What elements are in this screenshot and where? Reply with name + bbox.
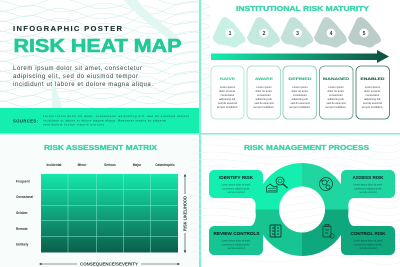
panel: institutional risk maturity: sed do eiusmod [291,101,310,105]
step: review controls: Lorem ipsum dolor sit amet, [221,240,251,242]
panel: institutional risk maturity: adipiscing elit, [292,97,309,101]
intro text: incididunt ut labore et dolore magna aliqua. [13,82,153,88]
heading: RISK ASSESSMENT MATRIX [44,143,157,152]
sources text [43,114,189,127]
step: assess risk: consectetur adipiscing elit, [354,187,382,190]
panel: institutional risk maturity: Lorem ipsum [328,85,345,89]
heading: INSTITUTIONAL RISK MATURITY [236,4,369,13]
panel: institutional risk maturity: Lorem ipsum [292,85,309,89]
heading: risk heat map: RISK HEAT MAP [14,36,182,56]
step: review controls: REVIEW CONTROLS [214,231,260,236]
donut segments [256,163,348,256]
row labels [16,180,33,246]
row labels: Frequent [16,180,31,184]
intro text [13,66,153,88]
step: assess risk: sed do eiusmod [360,191,377,194]
panel: institutional risk maturity: consectetur [257,93,271,97]
panel: institutional risk maturity: adipiscing elit, [219,97,236,101]
arrow [211,50,389,63]
panel: institutional risk maturity: dolor sit amet, [292,89,309,93]
panel: institutional risk maturity: dolor sit amet, [256,89,273,93]
sources label: SOURCES: [13,118,38,124]
panel: poster title [0,0,210,109]
intro text: Lorem ipsum dolor sit amet, consectetur [13,66,142,72]
panel: institutional risk maturity: Lorem ipsum [365,85,381,89]
panel: institutional risk maturity: adipiscing elit, [328,97,345,101]
panel: institutional risk maturity: consectetur [293,93,307,97]
column labels [47,163,175,167]
arrow: risk likelihood [182,174,188,253]
mountain icons: 5 [363,31,366,37]
step: identify risk: IDENTIFY RISK [219,175,253,180]
sources band [0,108,199,133]
panel: institutional risk maturity: consectetur [366,93,380,97]
step: identify risk: consectetur adipiscing elit, [222,187,250,190]
step: control risk: sed do eiusmod [360,247,377,250]
step: control risk [323,212,395,255]
row labels: Occasional [16,195,33,199]
panel: institutional risk maturity: dolor sit amet, [219,89,236,93]
step: identify risk [209,170,288,208]
stage cards [211,66,390,119]
step: control risk: CONTROL RISK [350,231,386,236]
step: assess risk: ASSESS RISK [352,175,384,180]
panel: institutional risk maturity: consectetur [329,93,343,97]
icon: gears [320,178,332,190]
panel: institutional risk maturity: sed do eiusmod [255,101,274,105]
heading: RISK MANAGEMENT PROCESS [244,143,369,152]
sources text: Lorem ipsum dolor sit amet, consectetur adipiscing elit, sed do eiusmod tempor [43,114,189,118]
panel: institutional risk maturity [211,4,390,119]
column labels: Serious [104,163,116,167]
icon: checklist [270,225,281,237]
step: control risk: Lorem ipsum dolor sit amet, [353,240,383,242]
panel: institutional risk maturity: dolor sit amet, [328,89,345,93]
column labels: Incidental [47,163,62,167]
arrow: risk likelihood: RISK LIKELIHOOD [182,196,188,231]
step: review controls: consectetur adipiscing elit, [222,243,250,246]
sources text: vestibulum lectus mauris ultrices [43,123,105,127]
panel: risk management process [190,136,400,265]
panel: institutional risk maturity: sed do eiusmod [327,101,346,105]
column labels: Minor [78,163,87,167]
mountain icons: 1 [229,31,232,37]
mountain icons: 2 [263,31,266,37]
icon: clipboard [323,224,334,238]
panel: institutional risk maturity: consectetur [221,93,235,97]
intro text: adipiscing elit, sed do eiusmod tempor [13,74,138,80]
icon: magnifier [266,177,288,192]
panel: risk assessment matrix [0,134,199,267]
arrow: consequence severity: CONSEQUENCE/SEVERITY [80,262,138,267]
column labels: Major [133,163,142,167]
panel: institutional risk maturity: sed do eiusmod [218,101,237,105]
panel: institutional risk maturity: adipiscing elit, [364,97,381,101]
panel: institutional risk maturity: tempor incididunt. [362,105,383,109]
panel: institutional risk maturity: adipiscing elit, [256,97,273,101]
mountain icons: 3 [296,31,299,37]
step: identify risk: Lorem ipsum dolor sit amet, [221,184,251,186]
panel: institutional risk maturity: MANAGED [323,76,349,81]
panel: institutional risk maturity: tempor incididunt. [325,105,347,109]
sources text: incididunt ut labore et dolore magna aliqua. Maecenas magna ac placerat [43,118,166,122]
panel: institutional risk maturity: tempor incididunt. [217,105,238,109]
step: review controls [209,212,281,255]
panel: institutional risk maturity: Lorem ipsum [256,85,273,89]
panel: institutional risk maturity: DEFINED [288,76,312,81]
panel: institutional risk maturity: sed do eiusmod [363,101,382,105]
panel: institutional risk maturity: AWARE [255,76,273,81]
panel: institutional risk maturity: Lorem ipsum [220,85,236,89]
row labels: Remote [16,227,28,231]
step: control risk: consectetur adipiscing elit, [354,243,382,246]
panel: institutional risk maturity: tempor incididunt. [253,105,275,109]
panel: institutional risk maturity: dolor sit amet, [364,89,381,93]
heat grid [41,174,178,252]
step: identify risk: sed do eiusmod [228,191,245,194]
heading: infographic poster: INFOGRAPHIC POSTER [13,24,123,33]
row labels: Seldom [16,211,28,215]
row labels: Unlikely [16,242,28,246]
panel: institutional risk maturity: NAIVE [220,76,236,81]
panel: institutional risk maturity: tempor incididunt. [289,105,311,109]
step: assess risk: Lorem ipsum dolor sit amet, [353,184,383,186]
mountain icons [212,17,381,48]
step: review controls: sed do eiusmod [228,247,245,250]
step: assess risk [320,170,395,208]
panel: institutional risk maturity: ENABLED [360,76,385,81]
mountain icons: 4 [330,31,333,37]
column labels: Catastrophic [155,163,175,167]
